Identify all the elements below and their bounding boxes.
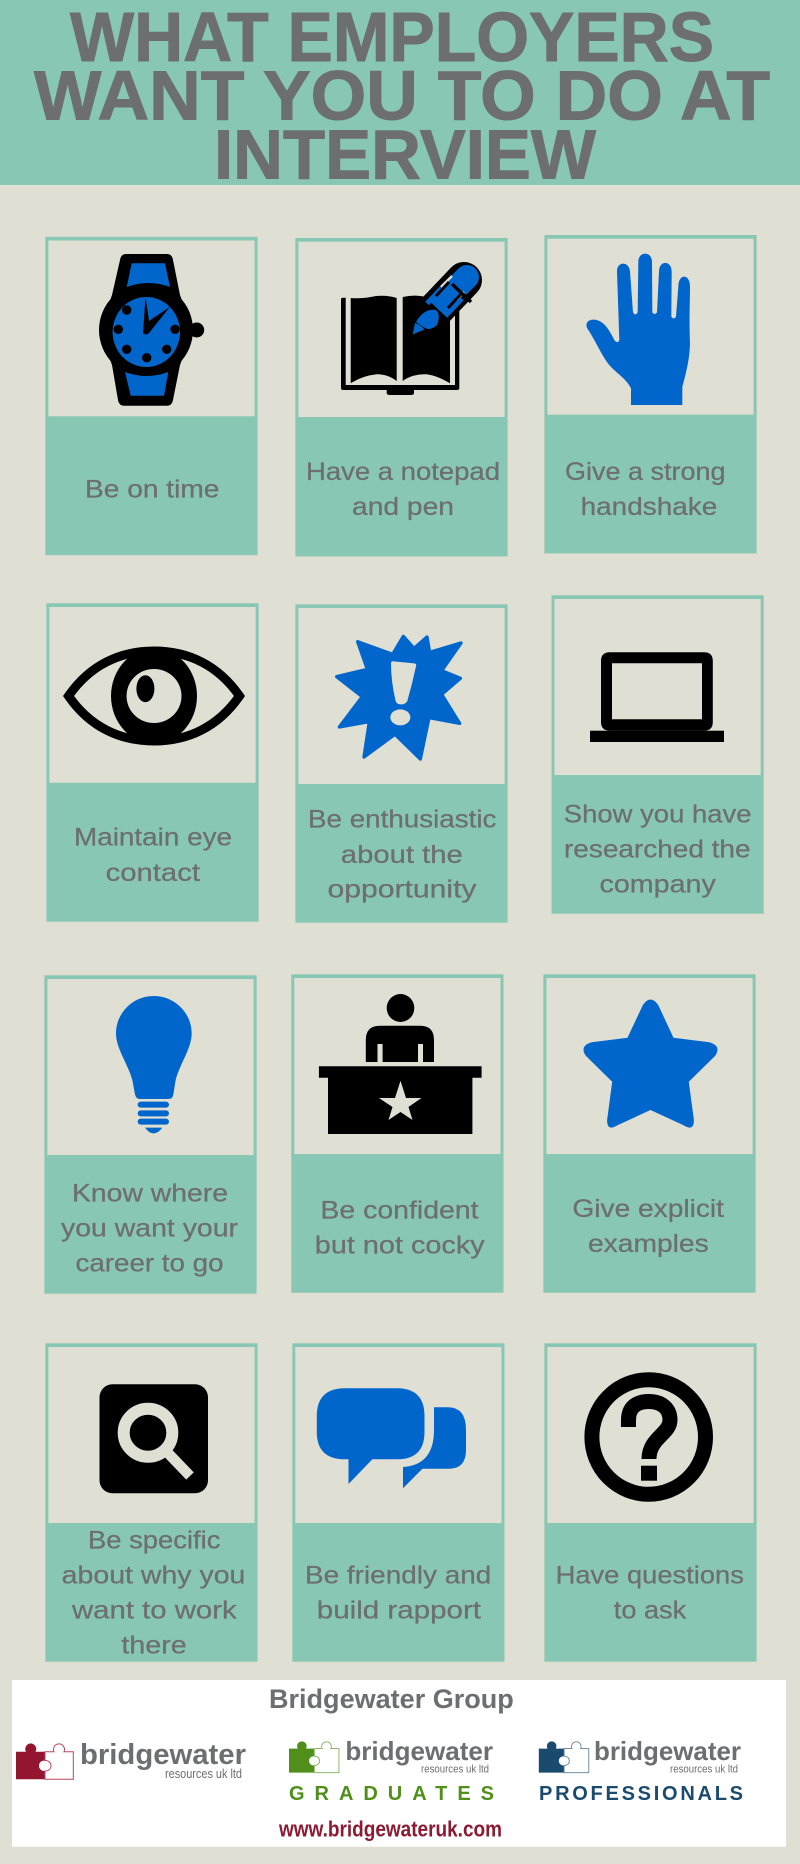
panel: career direction — [44, 975, 257, 1294]
graduates caption: GRADUATES — [289, 1783, 494, 1805]
logo strapline: resources uk ltd — [670, 1764, 738, 1776]
label: have questions: to ask — [614, 1597, 687, 1625]
label: friendly rapport — [305, 1562, 491, 1625]
label: enthusiastic — [308, 806, 496, 904]
panel: be on time — [45, 237, 258, 555]
label: explicit examples — [572, 1195, 724, 1258]
logo strapline: resources uk ltd — [165, 1767, 242, 1781]
panel: strong handshake — [544, 235, 757, 553]
label: enthusiastic: Be enthusiastic — [308, 806, 496, 834]
title — [34, 0, 770, 194]
label: enthusiastic: about the — [341, 841, 463, 869]
label: why work there: Be specific — [88, 1527, 220, 1555]
label: confident: but not cocky — [315, 1232, 485, 1260]
panel: why work there — [45, 1343, 258, 1662]
label: notepad and pen: and pen — [352, 493, 454, 521]
label: eye contact: Maintain eye — [74, 824, 232, 852]
panel: confident — [291, 974, 504, 1293]
label: enthusiastic: opportunity — [328, 876, 477, 904]
panel: have questions — [544, 1343, 757, 1662]
label: career direction: Know where — [72, 1180, 228, 1208]
label: why work there — [62, 1527, 245, 1660]
label: why work there: want to work — [71, 1597, 237, 1625]
label: strong handshake: Give a strong — [565, 458, 726, 486]
label: be on time: Be on time — [85, 476, 219, 504]
label: strong handshake: handshake — [581, 493, 717, 521]
logo wordmark: bridgewater — [80, 1739, 246, 1771]
label: researched company — [564, 801, 752, 899]
icon: exclamation burst — [337, 636, 461, 759]
panel: notepad and pen — [295, 238, 508, 556]
icon: question mark — [592, 1380, 706, 1494]
icon: watch — [99, 254, 204, 406]
panel: friendly rapport — [292, 1343, 504, 1662]
icon: laptop — [590, 652, 724, 742]
logo: bridgewater resources — [16, 1739, 246, 1781]
label: researched company: company — [600, 871, 716, 899]
website url: www.bridgewateruk.com — [278, 1817, 502, 1842]
logo: graduates — [289, 1736, 494, 1805]
label: friendly rapport: Be friendly and — [305, 1562, 491, 1590]
label: career direction: you want your — [61, 1215, 238, 1243]
label: why work there: there — [121, 1632, 187, 1660]
panel: explicit examples — [543, 974, 756, 1293]
logo wordmark: bridgewater — [345, 1736, 493, 1766]
label: eye contact: contact — [106, 859, 200, 887]
panel: enthusiastic — [295, 604, 508, 923]
icon: light bulb — [116, 996, 192, 1133]
icon: star — [584, 1000, 717, 1128]
icon: speech bubbles — [317, 1388, 466, 1488]
icon: green puzzle — [289, 1741, 339, 1773]
label: friendly rapport: build rapport — [317, 1597, 481, 1625]
title: INTERVIEW — [214, 116, 596, 194]
icon: hand — [586, 254, 690, 405]
logo strapline: resources uk ltd — [421, 1764, 489, 1776]
professionals caption: PROFESSIONALS — [539, 1783, 743, 1805]
icon: navy puzzle — [539, 1741, 589, 1773]
label: why work there: about why you — [62, 1562, 245, 1590]
panel: researched company — [552, 595, 764, 914]
icon: eye — [68, 648, 240, 744]
label: notepad and pen: Have a notepad — [306, 458, 500, 486]
label: explicit examples: Give explicit — [572, 1195, 724, 1223]
label: confident — [315, 1197, 485, 1260]
label: explicit examples: examples — [588, 1230, 709, 1258]
icon: red puzzle — [16, 1743, 73, 1779]
icon: person at desk — [319, 994, 482, 1134]
title: WHAT EMPLOYERS — [70, 0, 714, 76]
label: eye contact — [74, 824, 232, 887]
logo: professionals — [539, 1736, 743, 1805]
label: career direction — [61, 1180, 238, 1278]
logo wordmark: bridgewater — [594, 1736, 741, 1766]
label: confident: Be confident — [320, 1197, 479, 1225]
icon: magnifier — [100, 1384, 208, 1493]
panel: footer — [12, 1680, 786, 1847]
label: strong handshake — [565, 458, 726, 521]
label: researched company: Show you have — [564, 801, 752, 829]
title: WANT YOU TO DO AT — [34, 56, 770, 134]
icon: book and pen — [341, 276, 471, 395]
label: career direction: career to go — [76, 1250, 224, 1278]
label: have questions: Have questions — [556, 1562, 744, 1590]
footer heading: Bridgewater Group — [269, 1684, 514, 1714]
header banner — [0, 0, 800, 194]
panel: eye contact — [46, 603, 259, 922]
label: have questions — [556, 1562, 744, 1625]
label: researched company: researched the — [564, 836, 750, 864]
label: notepad and pen — [306, 458, 500, 521]
